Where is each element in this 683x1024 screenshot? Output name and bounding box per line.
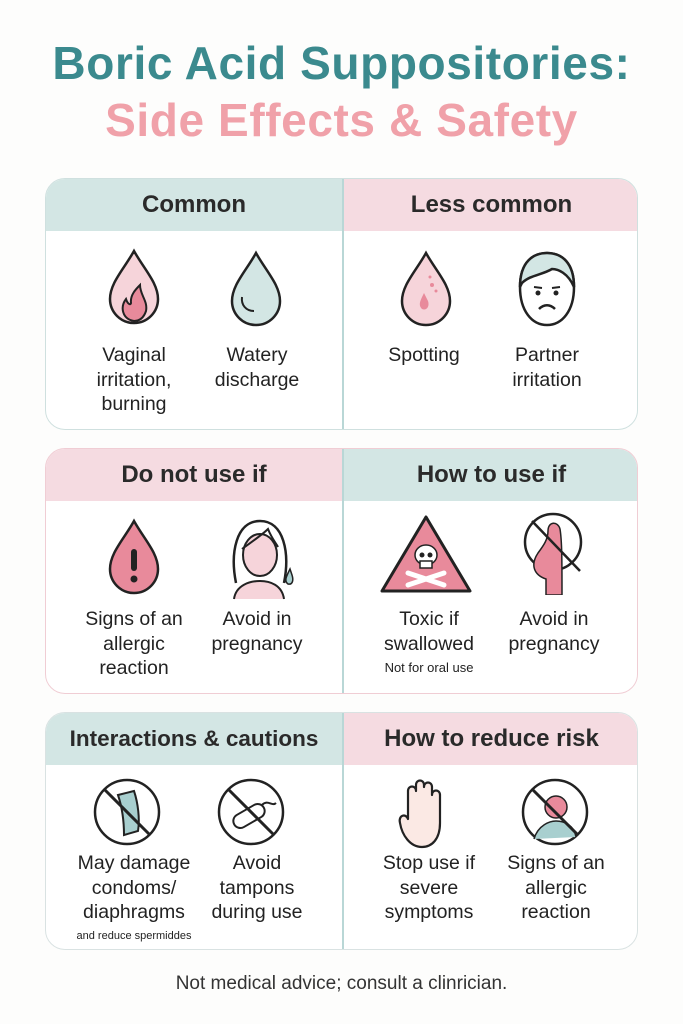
- heading: How to reduce risk: [344, 713, 639, 765]
- heading: How to reduce risk: How to reduce risk: [384, 725, 599, 752]
- heading: Less common: [344, 179, 639, 231]
- heading: Do not use if: Do not use if: [121, 461, 267, 488]
- icon: no condom: [94, 778, 160, 846]
- heading: Interactions & cautions: Interactions & cautions: [70, 726, 318, 751]
- heading: Common: Common: [142, 191, 246, 218]
- icon: no pregnancy: [524, 512, 582, 595]
- label: condoms: and reduce spermiddes: [77, 930, 191, 942]
- label: condoms: May damage condoms/ diaphragms: [78, 852, 190, 923]
- icon: no allergic: [522, 778, 588, 846]
- heading: How to use if: How to use if: [417, 461, 566, 488]
- label: signs of allergic reaction: Signs of an allergic reaction: [507, 852, 605, 923]
- label: partner irritation: Partner irritation: [512, 344, 582, 390]
- heading: How to use if: [344, 449, 639, 501]
- heading: Do not use if: [46, 449, 342, 501]
- label: toxic if swallowed: [384, 608, 474, 675]
- label: toxic if swallowed: Not for oral use: [385, 660, 473, 675]
- icon: no tampon: [218, 778, 284, 846]
- title line 1: Boric Acid Suppositories:: [52, 37, 631, 89]
- label: avoid in pregnancy: Avoid in pregnancy: [211, 608, 303, 654]
- heading: Less common: Less common: [411, 191, 572, 218]
- row 3 panels: [45, 712, 638, 950]
- row 1 panels: [45, 178, 638, 430]
- label: toxic if swallowed: Toxic if swallowed: [384, 608, 474, 654]
- footer disclaimer: Not medical advice; consult a clinrician.: [176, 973, 507, 994]
- icon: hand stop: [398, 779, 442, 848]
- heading: Common: [46, 179, 342, 231]
- icon: water drop: [230, 250, 282, 326]
- label: allergic reaction: Signs of an allergic reaction: [85, 608, 183, 679]
- label: tampons: Avoid tampons during use: [211, 852, 303, 923]
- label: spotting: Spotting: [388, 344, 460, 366]
- icon: flame drop: [108, 248, 160, 324]
- label: vaginal irritation: Vaginal irritation, burning: [97, 344, 171, 415]
- label: avoid in pregnancy 2: Avoid in pregnancy: [508, 608, 600, 654]
- icon: toxic triangle: [380, 515, 472, 592]
- icon: partner face: [518, 252, 576, 326]
- icon: spotting drop: [400, 250, 452, 326]
- icon: pregnant woman: [232, 520, 294, 600]
- icon: alert drop: [108, 518, 160, 594]
- row 2 panels: [45, 448, 638, 694]
- title line 2: Side Effects & Safety: [105, 94, 578, 146]
- label: watery discharge: Watery discharge: [215, 344, 299, 390]
- heading: Interactions & cautions: [46, 713, 342, 765]
- label: stop use: Stop use if severe symptoms: [383, 852, 475, 923]
